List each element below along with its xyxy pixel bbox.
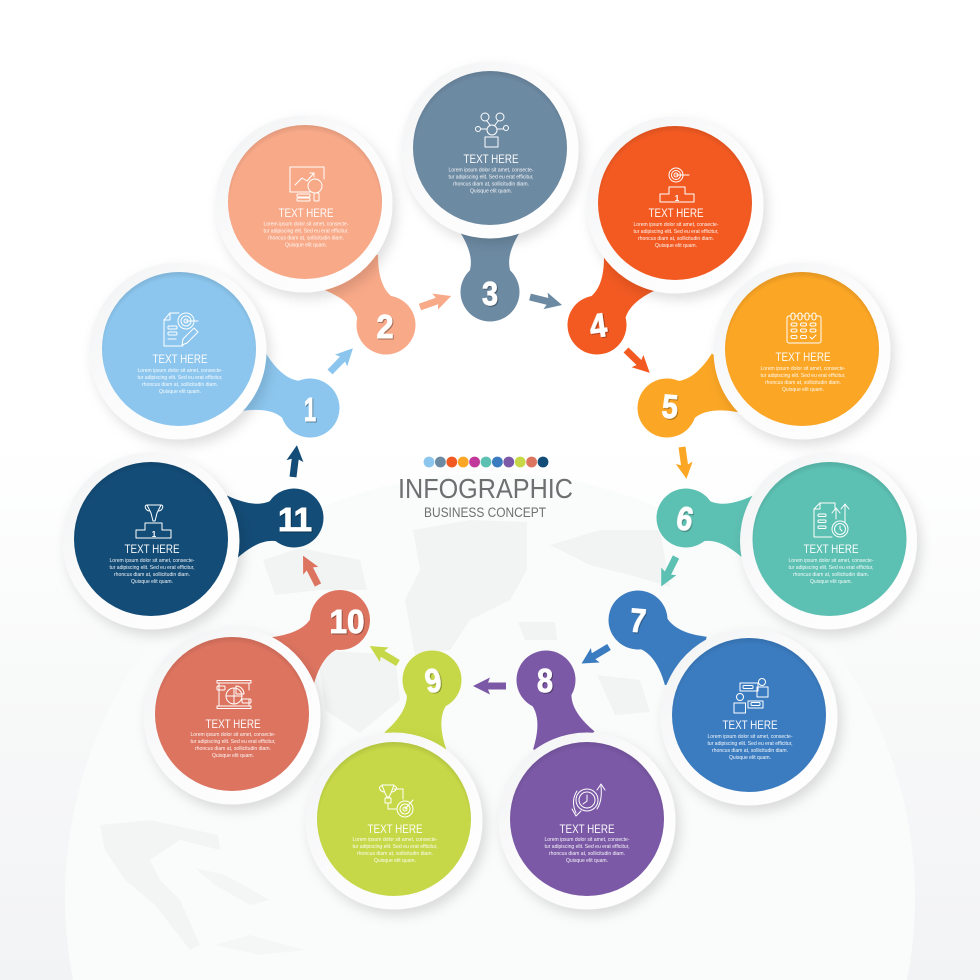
icon: document, clock and arrows <box>814 503 849 537</box>
body text 1 <box>138 368 223 395</box>
arrow 3 to 4 <box>528 289 564 313</box>
icon: trophy to target <box>380 785 413 817</box>
body text 7: rhoncus diam at, sollicitudin diam. <box>712 748 788 754</box>
body text 4: Lorem ipsum dolor sit amet, consecte- <box>634 222 719 228</box>
disk shade 4 <box>598 126 752 280</box>
heading 9: TEXT HERE <box>368 822 422 836</box>
body text 8 <box>544 837 630 864</box>
body text 6 <box>788 558 874 585</box>
disk shade 5 <box>725 272 879 426</box>
heading 7: TEXT HERE <box>722 718 778 732</box>
disk 5 <box>725 272 879 426</box>
body text 11 <box>110 558 195 585</box>
body text 3: Lorem ipsum dolor sit amet, consecte- <box>448 168 534 174</box>
body text 3: tur adipiscing elit. Sed eu erat efficitur, <box>448 174 534 180</box>
disk shade 1 <box>102 272 256 426</box>
disk 9 <box>317 742 471 896</box>
panel: step 6 <box>652 452 917 630</box>
heading 6: TEXT HERE <box>804 542 858 556</box>
disk 11 <box>74 462 228 616</box>
body text 5: tur adipiscing elit. Sed eu erat efficitur, <box>760 373 846 379</box>
heading 8: TEXT HERE <box>560 822 614 836</box>
number 10: 10 <box>330 603 364 640</box>
number 8: 8 <box>537 662 553 699</box>
arrow 11 to 1 <box>285 444 305 478</box>
body text 6: Quisque elit quam. <box>810 579 852 585</box>
disk shade 6 <box>752 462 906 616</box>
ring 1 <box>90 262 266 440</box>
arrow 6 to 7 <box>654 553 684 590</box>
disk shade 2 <box>228 125 382 279</box>
disk 8 <box>510 742 664 896</box>
body text 5: Lorem ipsum dolor sit amet, consecte- <box>760 366 846 372</box>
arrow 7 to 8 <box>577 640 613 671</box>
heading 4: TEXT HERE <box>648 206 704 220</box>
panel: step 7 <box>595 577 838 806</box>
title block <box>398 457 573 520</box>
ring 8 <box>498 732 676 910</box>
icon: flow chart with people <box>734 678 768 713</box>
body text 10 <box>190 732 276 759</box>
number 11: 11 <box>278 501 312 538</box>
panel: step 5 <box>627 262 890 449</box>
heading 11: TEXT HERE <box>124 542 180 556</box>
number 7: 7 <box>628 601 648 640</box>
arrow 5 to 6 <box>674 446 695 480</box>
body text 1: rhoncus diam at, sollicitudin diam. <box>142 382 218 388</box>
body text 10: Quisque elit quam. <box>212 753 254 759</box>
panel: step 1 <box>90 262 350 449</box>
body text 8: tur adipiscing elit. Sed eu erat efficitur, <box>544 844 630 850</box>
world map globe <box>65 473 915 980</box>
disk 1 <box>102 272 256 426</box>
arrow 9 to 10 <box>365 639 402 670</box>
connector node 3 <box>458 212 522 322</box>
number 1: 1 <box>304 391 316 428</box>
disk shade 9 <box>317 742 471 896</box>
icon: trophy on podium: 1 <box>152 530 157 539</box>
body text 8: Quisque elit quam. <box>566 858 608 864</box>
connector node 8 <box>507 643 599 766</box>
body text 5: rhoncus diam at, sollicitudin diam. <box>765 380 841 386</box>
icon: presentation board with pie chart <box>217 680 251 708</box>
body text 10: tur adipiscing elit. Sed eu erat efficitur, <box>190 739 276 745</box>
panel: step 3 <box>402 62 578 322</box>
body text 2: Lorem ipsum dolor sit amet, consecte- <box>264 222 349 228</box>
body text 11: Quisque elit quam. <box>131 579 173 585</box>
arrow 2 to 3 <box>417 288 454 315</box>
body text 10: Lorem ipsum dolor sit amet, consecte- <box>190 732 276 738</box>
connector node 1 <box>224 346 350 449</box>
icon: network nodes <box>476 113 508 147</box>
disk shade 8 <box>510 742 664 896</box>
arrow 8 to 9 <box>473 678 506 694</box>
icon: target and podium <box>660 168 694 203</box>
number 5: 5 <box>660 387 680 426</box>
body text 3: rhoncus diam at, sollicitudin diam. <box>453 182 529 188</box>
body text 8: rhoncus diam at, sollicitudin diam. <box>549 851 625 857</box>
body text 3 <box>448 168 534 194</box>
body text 4 <box>634 222 719 249</box>
body text 11: Lorem ipsum dolor sit amet, consecte- <box>110 558 195 564</box>
panel: step 9 <box>306 643 482 910</box>
body text 9 <box>352 837 438 864</box>
connector node 9 <box>380 643 471 766</box>
arrow 1 to 2 <box>324 342 359 378</box>
body text 9: Lorem ipsum dolor sit amet, consecte- <box>352 837 438 843</box>
body text 4: Quisque elit quam. <box>655 243 697 249</box>
icon: monitor with chart and magnifier <box>290 167 324 201</box>
body text 11: rhoncus diam at, sollicitudin diam. <box>114 572 190 578</box>
body text 1: Lorem ipsum dolor sit amet, consecte- <box>138 368 223 374</box>
body text 3: Quisque elit quam. <box>470 188 512 194</box>
body text 9: tur adipiscing elit. Sed eu erat efficitur, <box>352 844 438 850</box>
ring 10 <box>144 628 320 804</box>
heading 1: TEXT HERE <box>152 352 208 366</box>
body text 5: Quisque elit quam. <box>782 387 824 393</box>
panel: step 4 <box>554 116 764 367</box>
connector node 4 <box>554 240 667 367</box>
icon: clock with cycle arrows <box>572 784 605 816</box>
ring 5 <box>714 262 890 440</box>
panel: step 8 <box>498 643 676 910</box>
number 4: 4 <box>587 306 610 345</box>
icon: trophy on podium <box>136 505 171 539</box>
disk 2 <box>228 125 382 279</box>
body text 2: tur adipiscing elit. Sed eu erat efficitur, <box>264 228 349 234</box>
heading: INFOGRAPHIC <box>398 473 573 504</box>
heading 2: TEXT HERE <box>278 206 334 220</box>
ring 4 <box>586 116 764 294</box>
heading 3: TEXT HERE <box>464 152 518 166</box>
body text 9: Quisque elit quam. <box>374 858 416 864</box>
body text 7 <box>708 734 793 761</box>
connector node 7 <box>595 577 720 696</box>
ring 2 <box>216 116 392 292</box>
icon: target and podium: 1 <box>675 194 680 203</box>
body text 5 <box>760 366 846 393</box>
body text 4: rhoncus diam at, sollicitudin diam. <box>638 236 714 242</box>
panel: step 11 <box>62 452 328 630</box>
body text 6: tur adipiscing elit. Sed eu erat efficitur, <box>788 565 874 571</box>
disk shade 11 <box>74 462 228 616</box>
body text 6: Lorem ipsum dolor sit amet, consecte- <box>788 558 874 564</box>
number 2: 2 <box>376 308 394 345</box>
subheading: BUSINESS CONCEPT <box>424 505 546 520</box>
disk 6 <box>752 462 906 616</box>
colour dots <box>424 457 548 467</box>
body text 6: rhoncus diam at, sollicitudin diam. <box>793 572 869 578</box>
connector node 6 <box>652 482 770 561</box>
connector node 2 <box>315 241 429 367</box>
disk 3 <box>413 71 567 225</box>
connector node 11 <box>210 482 328 561</box>
ring 7 <box>660 628 838 806</box>
body text 1: Quisque elit quam. <box>159 389 201 395</box>
number 3: 3 <box>482 275 498 312</box>
connector node 5 <box>627 347 753 449</box>
panel: step 10 <box>144 576 384 804</box>
disk 10 <box>155 637 309 791</box>
disk shade 3 <box>413 71 567 225</box>
body text 7: Quisque elit quam. <box>729 755 771 761</box>
body text 2: rhoncus diam at, sollicitudin diam. <box>268 236 344 242</box>
disk shade 7 <box>672 638 826 792</box>
icon: calendar <box>787 313 821 343</box>
heading 5: TEXT HERE <box>776 350 830 364</box>
body text 11: tur adipiscing elit. Sed eu erat efficitur, <box>110 565 195 571</box>
disk 7 <box>672 638 826 792</box>
body text 2: Quisque elit quam. <box>285 242 327 248</box>
arrow 4 to 5 <box>620 344 656 379</box>
disk 4 <box>598 126 752 280</box>
disk shade 10 <box>155 637 309 791</box>
panel: step 2 <box>216 116 429 367</box>
body text 8: Lorem ipsum dolor sit amet, consecte- <box>544 837 630 843</box>
body text 4: tur adipiscing elit. Sed eu erat efficitur, <box>634 229 719 235</box>
icon: document with target and pencil <box>164 313 198 346</box>
heading 10: TEXT HERE <box>206 717 260 731</box>
arrow 10 to 11 <box>295 552 326 589</box>
ring 9 <box>306 732 482 910</box>
body text 9: rhoncus diam at, sollicitudin diam. <box>357 851 433 857</box>
ring 6 <box>740 452 917 630</box>
number 6: 6 <box>673 499 697 538</box>
ring 11 <box>62 452 240 630</box>
ring 3 <box>402 62 578 238</box>
connector node 10 <box>259 576 384 697</box>
body text 10: rhoncus diam at, sollicitudin diam. <box>195 746 271 752</box>
number 9: 9 <box>422 661 444 700</box>
body text 1: tur adipiscing elit. Sed eu erat efficitur, <box>138 375 223 381</box>
body text 2 <box>264 222 349 248</box>
body text 7: tur adipiscing elit. Sed eu erat efficitur, <box>708 741 793 747</box>
body text 7: Lorem ipsum dolor sit amet, consecte- <box>708 734 793 740</box>
